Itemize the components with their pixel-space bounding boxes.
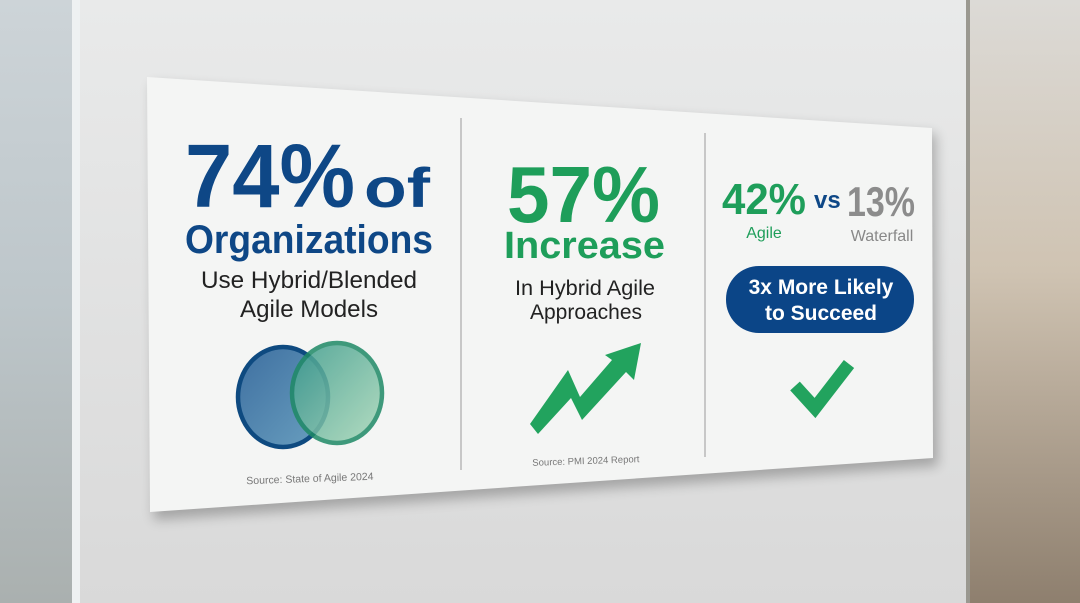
background: right glass [966, 0, 1080, 603]
icon: venn diagram [238, 343, 382, 447]
panel: 57% increase: Approaches [530, 301, 642, 324]
text: in hybrid agile: In Hybrid Agile [515, 277, 655, 300]
text: use hybrid: Use Hybrid/Blended [201, 267, 417, 294]
panel: 3x more likely: Waterfall [851, 228, 913, 245]
labels: Agile [746, 225, 782, 242]
callout pill: 3x More Likely [749, 276, 894, 299]
heading: 57%: 57% [507, 150, 660, 239]
board shadow [152, 84, 938, 520]
divider lines [460, 118, 462, 470]
icon: rising arrow [530, 343, 641, 434]
source: Source: PMI 2024 Report [532, 454, 640, 469]
panel: 3x more likely: 13% [847, 178, 915, 225]
panel: 3x more likely: vs [814, 187, 841, 214]
heading: 74% of: 74% [185, 127, 355, 227]
panel: 74% organizations: Agile Models [240, 296, 378, 323]
heading: Organizations: Organizations [185, 218, 433, 262]
panel: 3x more likely [722, 175, 915, 408]
panel: 74% organizations: of [364, 156, 430, 219]
stat: 42% vs 13%: 42% [722, 175, 806, 224]
panel: 57% increase [504, 150, 665, 469]
heading: Increase: Increase [504, 225, 665, 267]
board [147, 77, 933, 512]
source: Source: State of Agile 2024 [246, 471, 374, 487]
panel: 74% organizations [185, 127, 433, 487]
callout pill: to Succeed [765, 302, 877, 325]
icon: checkmark [795, 364, 849, 408]
background: left glass [0, 0, 80, 603]
callout pill [726, 266, 914, 333]
